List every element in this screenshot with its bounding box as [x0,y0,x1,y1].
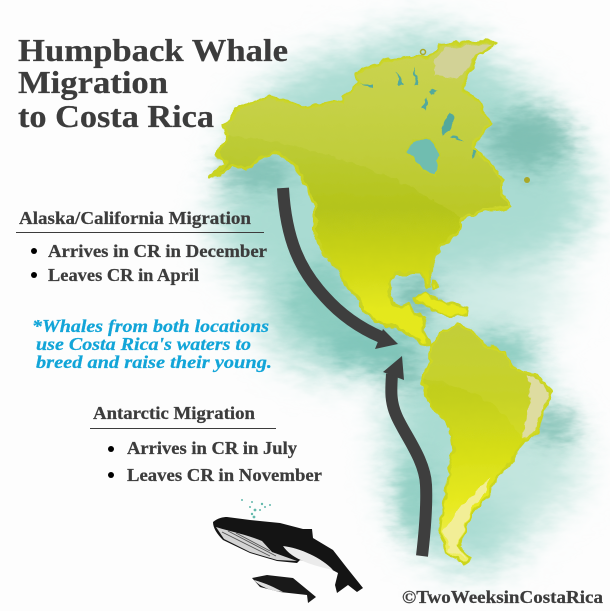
title: Humpback Whale [18,32,288,68]
landmass: South America [423,325,552,563]
Brazil pale area [522,376,549,440]
map: South America [420,320,560,563]
map: North America [205,30,520,347]
Baffin pale area [435,45,492,78]
title: Migration [18,64,168,100]
bullet list: Arrives in CR in December [48,241,267,261]
icon: humpback whale with calf [213,499,363,603]
bullet list: Arrives in CR in July [127,438,297,458]
map: small Atlantic island [524,177,530,183]
Patagonia pale area [443,478,490,558]
map: arctic island ring [420,50,426,54]
bullet list: Leaves CR in April [48,265,199,285]
arctic channels [360,66,476,158]
bullet list [31,241,267,285]
callout: breeding note: *Whales from both locations [32,316,269,336]
arrow: Alaska/California migration [283,188,398,349]
water spout [241,499,271,518]
Hudson Bay [407,138,440,177]
calf [252,575,316,603]
map: Caribbean islands [414,281,467,316]
panel: Antarctic migration [90,403,322,485]
ocean haze [215,30,590,570]
callout: breeding note: breed and raise their young. [36,352,272,372]
heading: Alaska/California Migration [19,208,251,228]
adult whale [213,517,363,593]
adult whale white patch [283,546,333,570]
title: to Costa Rica [18,98,214,134]
light upper shading [225,42,509,218]
throat grooves [222,531,276,556]
adult whale throat [216,527,297,561]
heading: Antarctic Migration [93,403,255,423]
panel: Alaska/California migration [16,208,267,285]
bullet list [108,438,322,485]
light upper shading [422,324,552,440]
bullet list: Leaves CR in November [127,465,322,485]
title [18,32,288,134]
landmass: North America [210,42,510,347]
copyright credit: ©TwoWeeksinCostaRica [402,587,603,607]
arrow: Antarctic migration [383,356,426,556]
callout: breeding note [32,316,272,372]
callout: breeding note: use Costa Rica's waters to [36,334,251,354]
calf belly [254,580,283,592]
